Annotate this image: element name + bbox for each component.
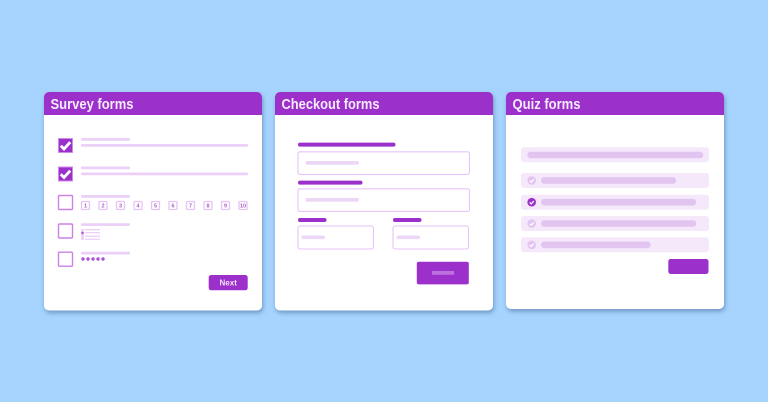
panel: quiz forms [506, 92, 724, 309]
survey question 3: number scale: 1 [84, 204, 87, 210]
checkout field 3 [298, 218, 374, 249]
next button [209, 275, 248, 290]
quiz header bar [506, 92, 724, 115]
checkout button [417, 262, 469, 284]
survey question 3: number scale: 10 [240, 204, 246, 210]
quiz option 1 [521, 173, 709, 188]
quiz option 3 [521, 216, 709, 231]
quiz question bar [521, 147, 709, 162]
survey question 3: number scale: 8 [206, 204, 210, 210]
survey question 2 [58, 166, 248, 181]
survey question 3: number scale: 7 [189, 204, 192, 210]
survey question 5: rating [58, 252, 130, 266]
survey question 3: number scale: 6 [171, 204, 175, 210]
heading: survey forms: Survey forms [50, 97, 134, 113]
checkout field 4 [393, 218, 468, 249]
quiz card background [506, 92, 724, 309]
next button: Next [220, 279, 237, 288]
survey question 3: number scale: 9 [224, 204, 227, 210]
heading: checkout forms: Checkout forms [282, 97, 380, 113]
survey question 3: number scale [58, 195, 247, 210]
survey question 4: list [58, 223, 130, 240]
heading: quiz forms: Quiz forms [512, 97, 580, 113]
survey question 3: number scale: 3 [119, 204, 122, 210]
checkout field 1 [298, 143, 470, 174]
quiz button [668, 259, 708, 274]
checkout card background [275, 92, 493, 310]
panel: checkout forms [275, 92, 493, 310]
survey question 3: number scale: 5 [154, 204, 157, 210]
panel: survey forms [44, 92, 262, 310]
quiz option 2: selected [521, 195, 709, 210]
survey question 1 [58, 138, 248, 152]
survey card background [44, 92, 262, 310]
quiz option 4 [521, 237, 709, 252]
survey header bar [44, 92, 262, 115]
checkout field 2 [298, 181, 470, 211]
survey question 3: number scale: 4 [136, 204, 140, 210]
checkout header bar [275, 92, 493, 115]
survey question 3: number scale: 2 [101, 204, 105, 210]
